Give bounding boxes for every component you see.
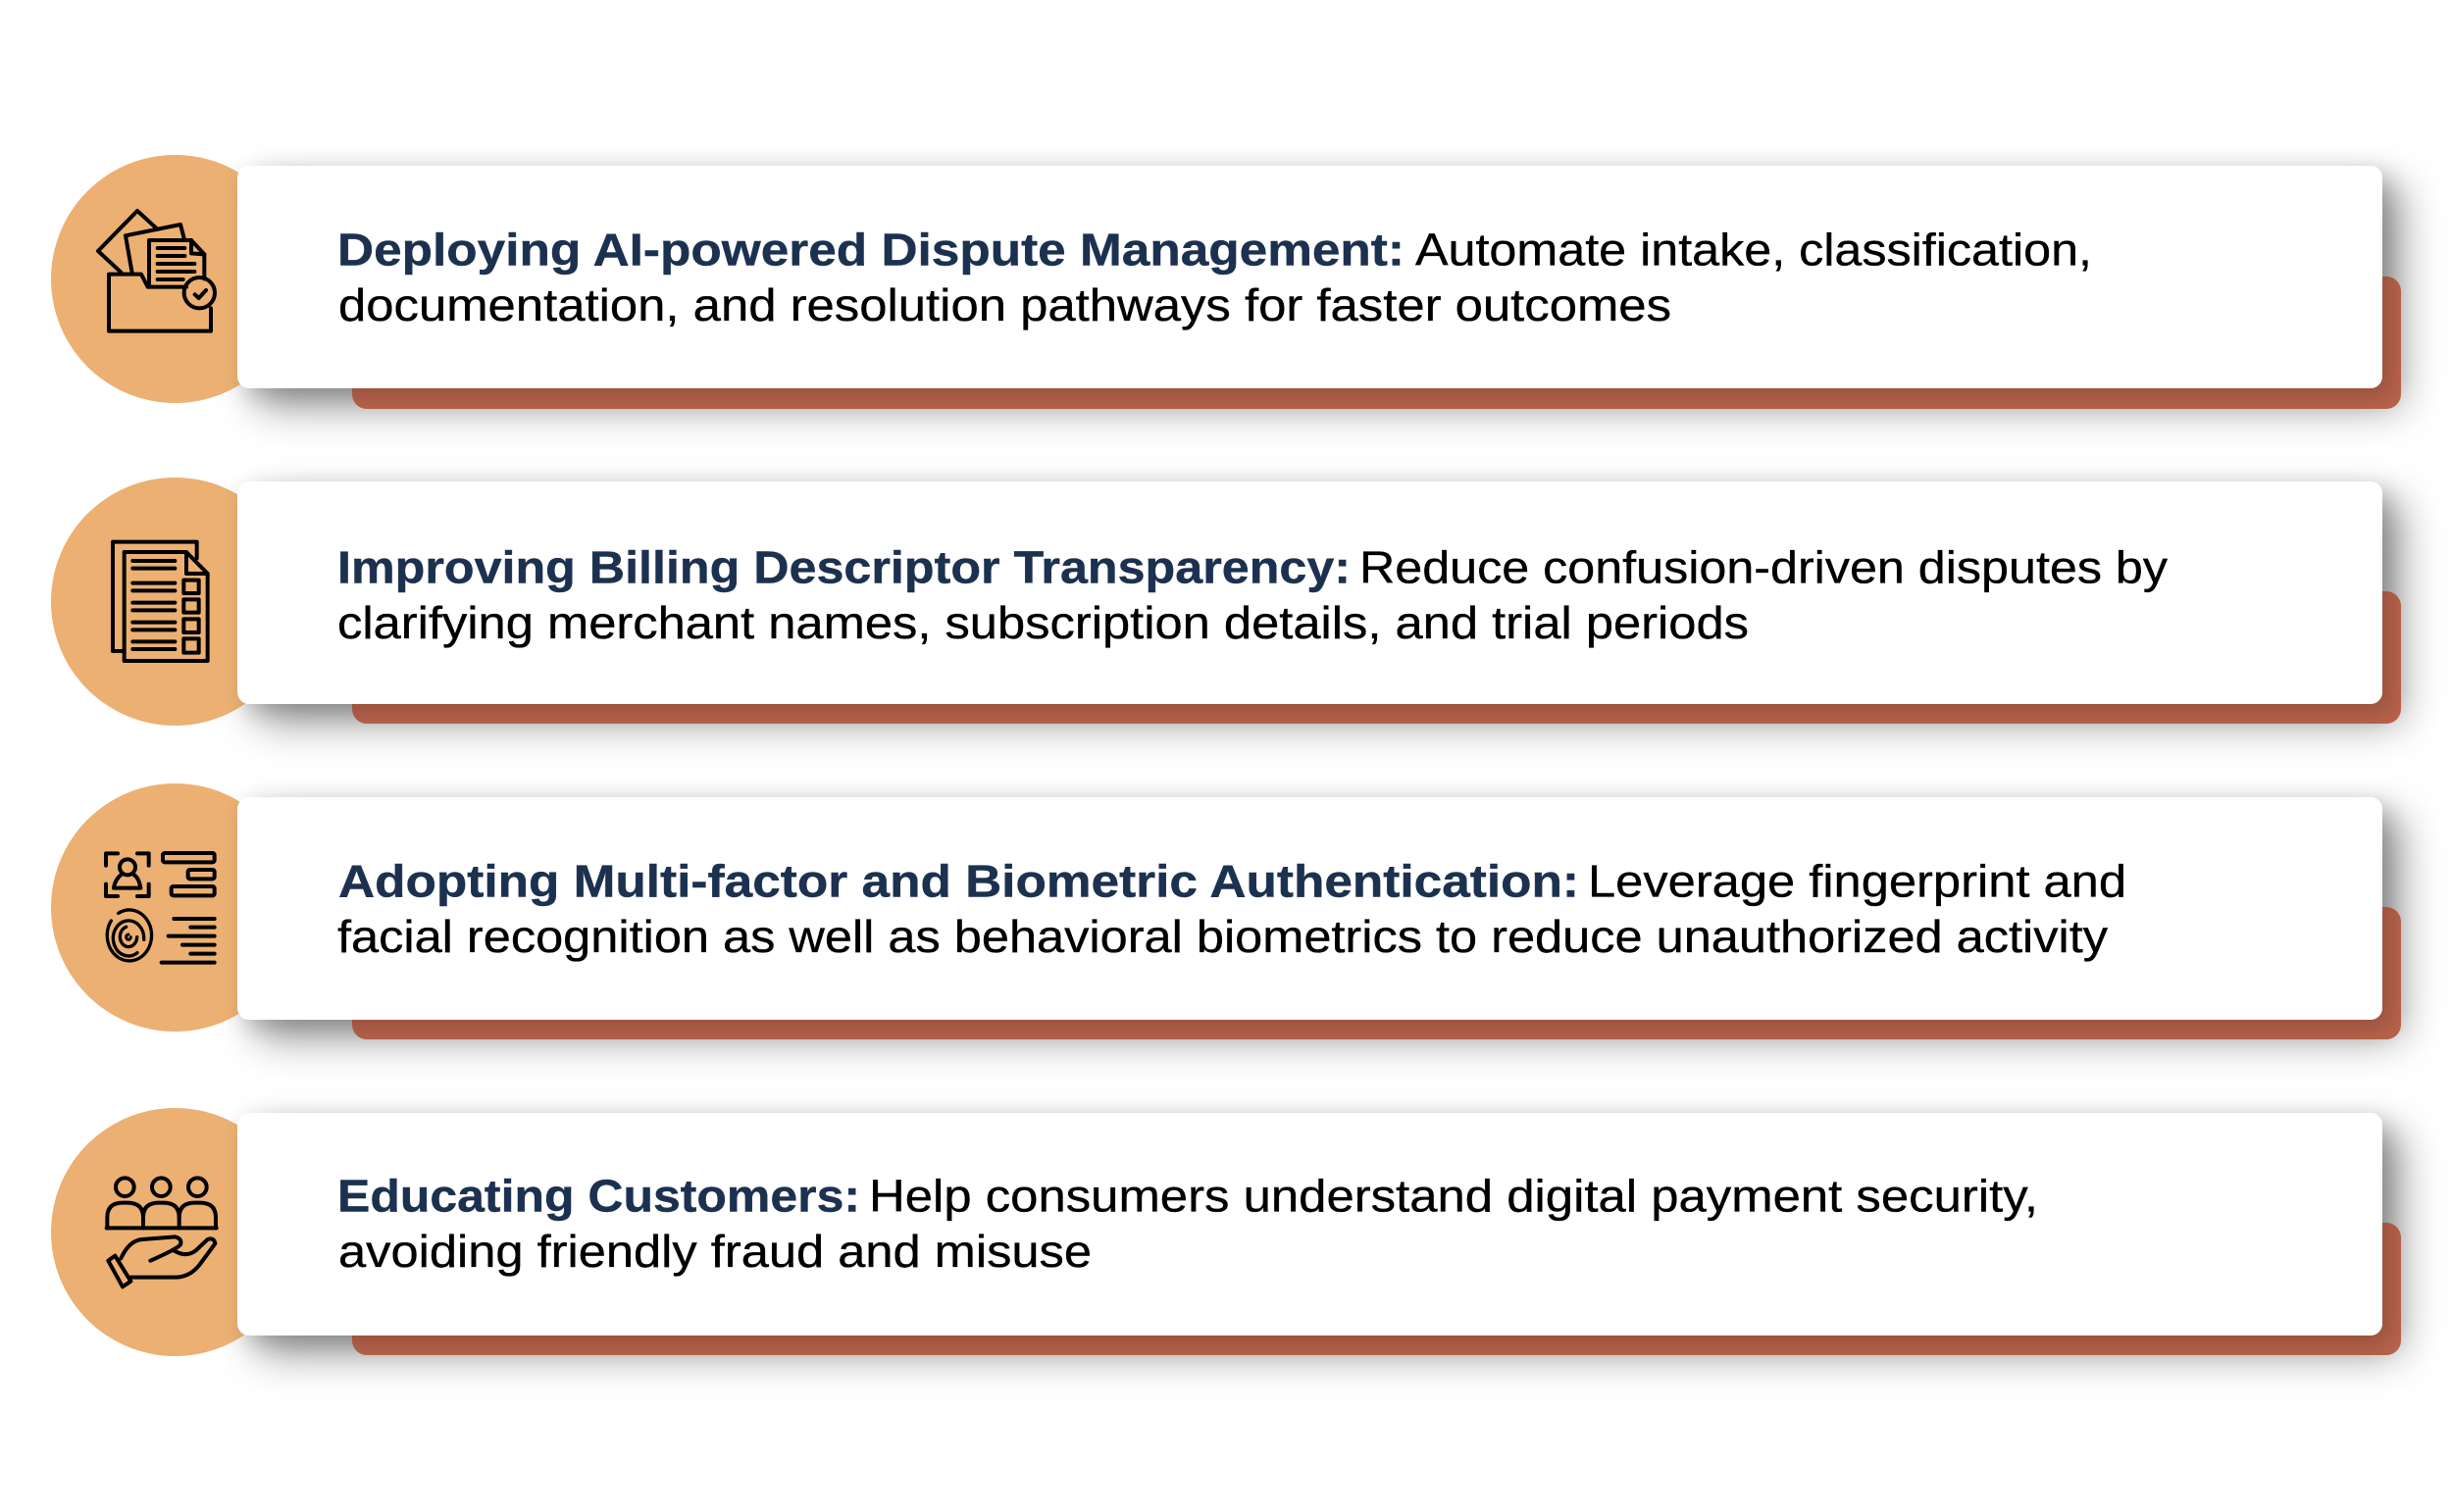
accent backing card [352, 907, 2401, 1039]
description line 2: facial recognition as well as behavioral biometrics to reduce unauthorized activity [337, 911, 2108, 962]
text block [337, 224, 2092, 330]
heading: Improving Billing Descriptor Transparency: [337, 541, 1351, 592]
heading: Educating Customers: [337, 1171, 860, 1222]
panel: billing descriptor transparency [51, 472, 2428, 751]
description line 2: avoiding friendly fraud and misuse [338, 1226, 1092, 1277]
description line 1: Automate intake, classification, [1415, 224, 2092, 275]
text block [337, 541, 2168, 648]
panel: AI-powered dispute management [51, 155, 2428, 435]
description line 2: documentation, and resolution pathways for faster outcomes [338, 279, 1671, 330]
white card [237, 166, 2382, 388]
panel: educating customers [51, 1103, 2428, 1383]
accent backing card [352, 1223, 2401, 1355]
icon: hand holding three people [104, 1176, 219, 1288]
circle badge [51, 783, 299, 1032]
circle badge [51, 155, 299, 403]
white card [237, 481, 2382, 704]
text block [337, 855, 2126, 962]
description line 1: Leverage fingerprint and [1588, 855, 2126, 906]
panel: multi-factor and biometric authentication [51, 783, 2428, 1067]
heading: Deploying AI-powered Dispute Management: [337, 224, 1405, 275]
accent backing card [352, 591, 2401, 724]
white card [237, 1113, 2382, 1336]
text block [337, 1171, 2038, 1277]
white card [237, 797, 2382, 1020]
icon: face scan and fingerprint [104, 851, 217, 965]
accent backing card [352, 277, 2401, 409]
circle badge [51, 478, 299, 726]
heading: Adopting Multi-factor and Biometric Authentication: [338, 855, 1579, 906]
icon: folder with documents and check mark [96, 208, 217, 333]
description line 2: clarifying merchant names, subscription details, and trial periods [337, 597, 1749, 648]
description line 1: Reduce confusion-driven disputes by [1359, 541, 2168, 592]
circle badge [51, 1108, 299, 1356]
description line 1: Help consumers understand digital payment security, [869, 1171, 2038, 1222]
icon: stacked billing documents [111, 539, 210, 663]
